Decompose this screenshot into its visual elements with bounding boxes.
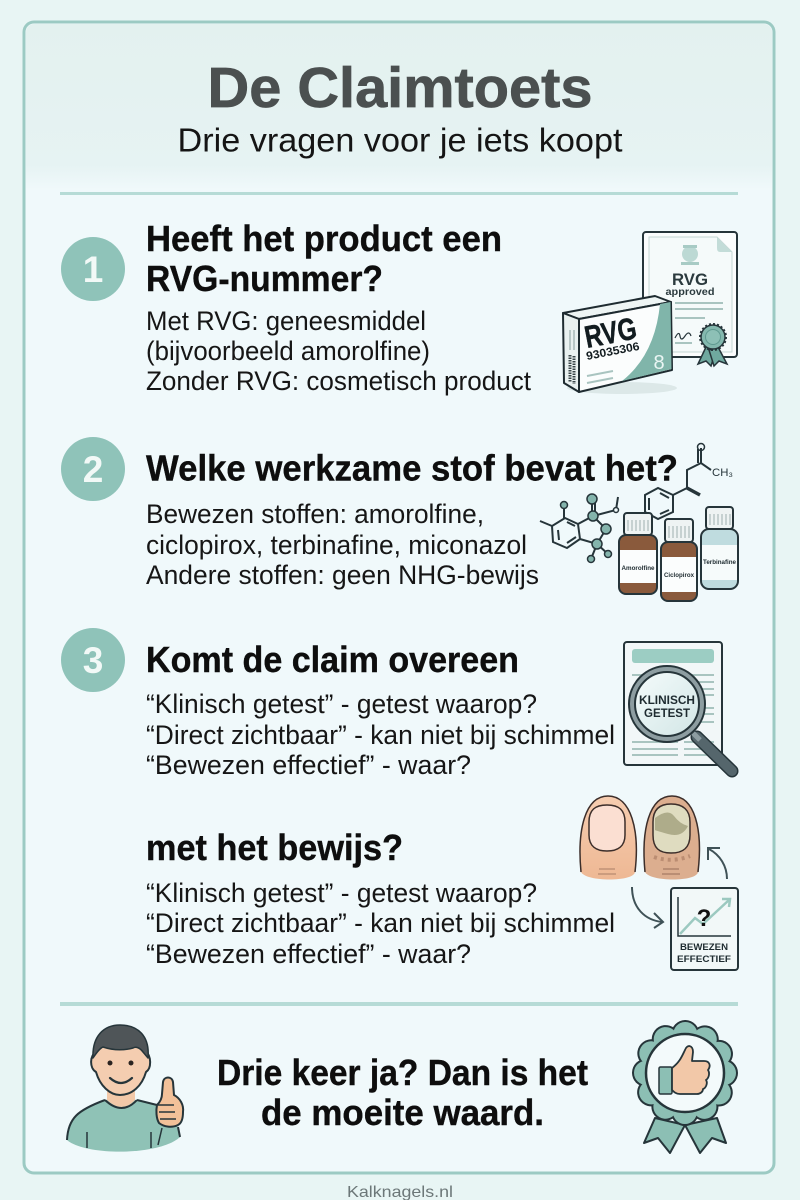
icon: report with magnifier: KLINISCH	[639, 693, 695, 707]
step 3	[61, 628, 615, 969]
arrow: chart to nail	[708, 848, 727, 879]
bottle: ciclopirox: Ciclopirox	[664, 572, 694, 579]
body text 3: “Direct zichtbaar” - kan niet bij schimmel	[146, 720, 615, 750]
heading 1	[146, 218, 502, 299]
icon: RVG certificate and box	[563, 232, 737, 394]
body text 1: Met RVG: geneesmiddel	[146, 306, 426, 336]
icon: smiling person with thumb up	[67, 1025, 183, 1152]
infected nail	[644, 796, 699, 880]
medicine box	[563, 296, 677, 394]
number badge 1	[61, 237, 125, 301]
certificate: approved	[666, 286, 714, 298]
icon: rosette with thumb up	[644, 1034, 726, 1153]
number badge 2: 2	[83, 449, 103, 490]
closing message: Drie keer ja? Dan is het	[217, 1052, 588, 1093]
number badge 1: 1	[83, 249, 103, 290]
step 2	[61, 437, 678, 590]
body text 1: (bijvoorbeeld amorolfine)	[146, 336, 430, 366]
molecule right: CH₃	[712, 467, 733, 479]
evidence chart card	[671, 888, 738, 970]
bottle: amorolfine: Amorolfine	[622, 565, 655, 572]
body text 3: “Bewezen effectief” - waar?	[146, 750, 471, 780]
title: De Claimtoets	[208, 56, 592, 120]
body text 2: ciclopirox, terbinafine, miconazol	[146, 530, 527, 560]
heading 3 continued: met het bewijs?	[146, 827, 403, 868]
icon: healthy and infected nails	[580, 796, 738, 970]
icon: report with magnifier	[624, 642, 732, 771]
medicine box: 8	[653, 352, 665, 374]
body text 1: Zonder RVG: cosmetisch product	[146, 366, 531, 396]
bottle: ciclopirox	[661, 519, 697, 601]
evidence chart card: EFFECTIEF	[677, 954, 731, 965]
certificate	[643, 232, 737, 357]
evidence chart card: ?	[697, 905, 711, 932]
number badge 3	[61, 628, 125, 692]
icon: report with magnifier: GETEST	[644, 706, 691, 720]
icon: molecules and bottles	[540, 444, 738, 601]
body text 3 repeated: “Direct zichtbaar” - kan niet bij schimmel	[146, 908, 615, 938]
closing message: de moeite waard.	[261, 1092, 544, 1133]
body text 2	[146, 499, 539, 590]
bottle: amorolfine	[619, 513, 657, 594]
closing message	[217, 1052, 588, 1133]
healthy nail	[580, 796, 636, 880]
body text 3 repeated: “Bewezen effectief” - waar?	[146, 939, 471, 969]
number badge 3: 3	[83, 640, 103, 681]
bottle: terbinafine: Terbinafine	[703, 559, 736, 566]
body text 3: “Klinisch getest” - getest waarop?	[146, 689, 537, 719]
body text 2: Andere stoffen: geen NHG-bewijs	[146, 560, 539, 590]
evidence chart card: BEWEZEN	[680, 942, 728, 953]
body text 1	[146, 306, 531, 396]
body text 3	[146, 689, 615, 780]
arrow: nail to chart	[632, 887, 663, 928]
molecule left	[540, 494, 618, 562]
heading 1: RVG-nummer?	[146, 258, 383, 299]
heading 1: Heeft het product een	[146, 218, 502, 259]
subtitle: Drie vragen voor je iets koopt	[178, 122, 622, 158]
heading 2: Welke werkzame stof bevat het?	[146, 448, 678, 488]
medicine box: 93035306	[585, 341, 641, 363]
molecule right	[645, 444, 733, 519]
number badge 2	[61, 437, 125, 501]
medicine box: RVG	[582, 311, 639, 355]
step 1	[61, 218, 531, 396]
ribbon seal	[698, 324, 727, 366]
body text 3 repeated	[146, 878, 615, 969]
body text 3 repeated: “Klinisch getest” - getest waarop?	[146, 878, 537, 908]
heading 3: Komt de claim overeen	[146, 639, 519, 680]
body text 2: Bewezen stoffen: amorolfine,	[146, 499, 484, 529]
bottle: terbinafine	[701, 507, 738, 589]
certificate: RVG	[672, 270, 708, 289]
